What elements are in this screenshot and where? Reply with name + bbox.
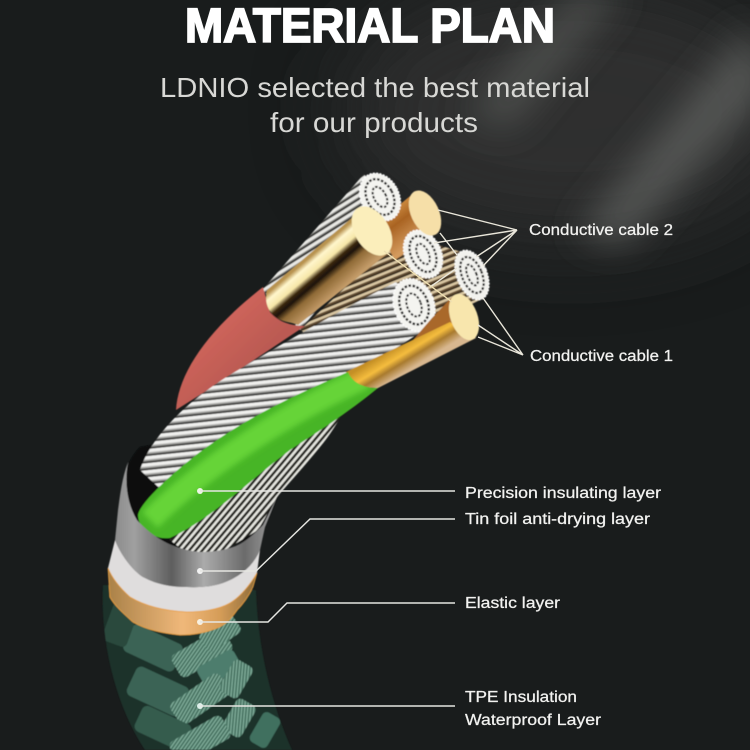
callout: elastic layer: Elastic layer — [465, 595, 560, 612]
leader lines: conductive cable 2 — [430, 210, 517, 287]
gold conductor tip — [343, 199, 401, 263]
callout: precision insulating layer — [197, 485, 661, 502]
subtitle: for our products — [270, 107, 478, 138]
wire end: copper tip — [402, 185, 448, 241]
twisted silver bundle — [140, 282, 432, 498]
leader lines: conductive cable 1 — [384, 251, 523, 355]
callout: precision insulating layer: Precision insulating layer — [465, 485, 661, 502]
strand: brown wires in centre — [300, 235, 484, 360]
wire end: rear silver — [448, 245, 496, 305]
copper wires behind gold conductor — [400, 296, 470, 355]
lower silver strand — [170, 418, 340, 552]
tin foil layer — [115, 462, 277, 587]
wire end: front silver — [386, 273, 442, 337]
subtitle — [160, 72, 590, 138]
gold conductor small — [346, 322, 476, 388]
strand: copper conductor 2 — [375, 192, 437, 260]
wire end: top silver — [351, 166, 409, 228]
gold conductor large — [266, 217, 387, 325]
callout: tin foil anti-drying layer — [197, 511, 650, 574]
callout: tpe insulation waterproof layer — [197, 689, 601, 729]
cable illustration — [95, 166, 496, 750]
callout: elastic layer — [197, 595, 560, 625]
callout: tpe insulation waterproof layer: Waterproof Layer — [465, 712, 601, 729]
wire end: middle silver — [396, 224, 450, 284]
green insulated conductor — [137, 372, 378, 540]
label: conductive cable 2: Conductive cable 2 — [529, 222, 673, 239]
label: conductive cable 1: Conductive cable 1 — [530, 348, 673, 365]
red insulated conductor — [176, 287, 305, 410]
callout: tpe insulation waterproof layer: TPE Insulation — [465, 689, 577, 706]
orange elastic layer — [108, 568, 257, 635]
braided TPE jacket — [102, 584, 292, 750]
callout: tin foil anti-drying layer: Tin foil anti-drying layer — [465, 511, 650, 528]
strand: silver wires to top end — [262, 174, 400, 330]
title: MATERIAL PLAN — [185, 0, 555, 53]
gold conductor small tip — [443, 290, 485, 344]
cable mouth interior — [121, 440, 320, 560]
white elastic band — [108, 540, 260, 612]
subtitle: LDNIO selected the best material — [160, 72, 590, 103]
